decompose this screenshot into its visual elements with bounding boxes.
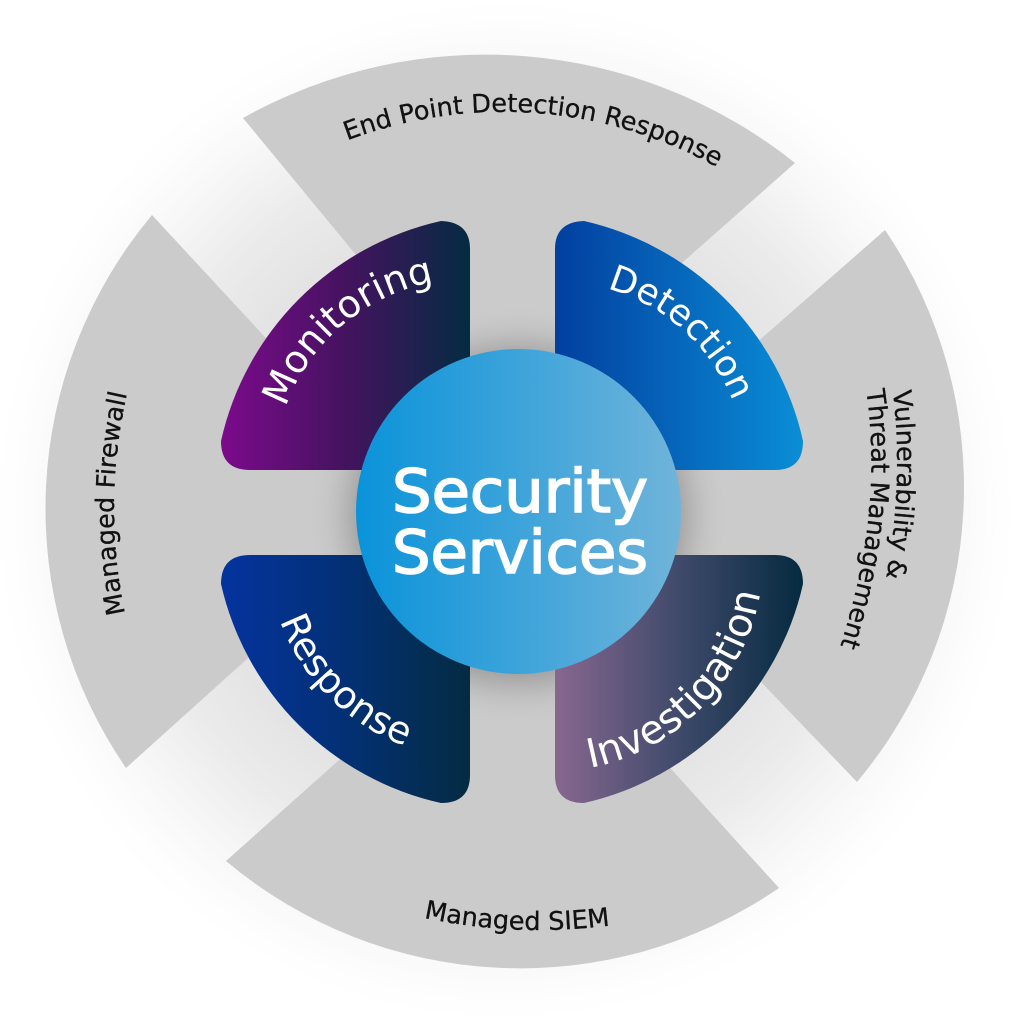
label: vulnerability and threat management — [840, 388, 916, 650]
core title: Services — [392, 518, 648, 588]
segment: managed SIEM — [226, 512, 779, 968]
cross connector — [260, 300, 760, 760]
label: response: Response — [281, 613, 409, 744]
label: investigation: Investigation — [587, 593, 760, 768]
segment: managed firewall — [45, 215, 388, 768]
panel: detection — [555, 221, 803, 470]
panel: monitoring — [221, 221, 470, 470]
label: detection: Detection — [610, 264, 748, 398]
core circle: security services — [356, 349, 681, 674]
segment: end point detection response — [243, 55, 795, 512]
segment: vulnerability and threat management — [600, 230, 964, 782]
core shadow — [352, 349, 684, 681]
panel: response — [221, 555, 470, 803]
core title: Security — [392, 457, 648, 527]
label: end point detection response: End Point Detection Response — [343, 94, 720, 166]
label: managed SIEM: Managed SIEM — [426, 900, 608, 934]
label: managed firewall: Managed Firewall — [94, 392, 127, 615]
label: monitoring: Monitoring — [262, 262, 431, 404]
label: vulnerability and threat management: Threat Management — [840, 388, 890, 650]
core title — [392, 457, 648, 588]
label: vulnerability and threat management: Vulnerability & — [886, 389, 916, 578]
panel: investigation — [555, 555, 803, 803]
